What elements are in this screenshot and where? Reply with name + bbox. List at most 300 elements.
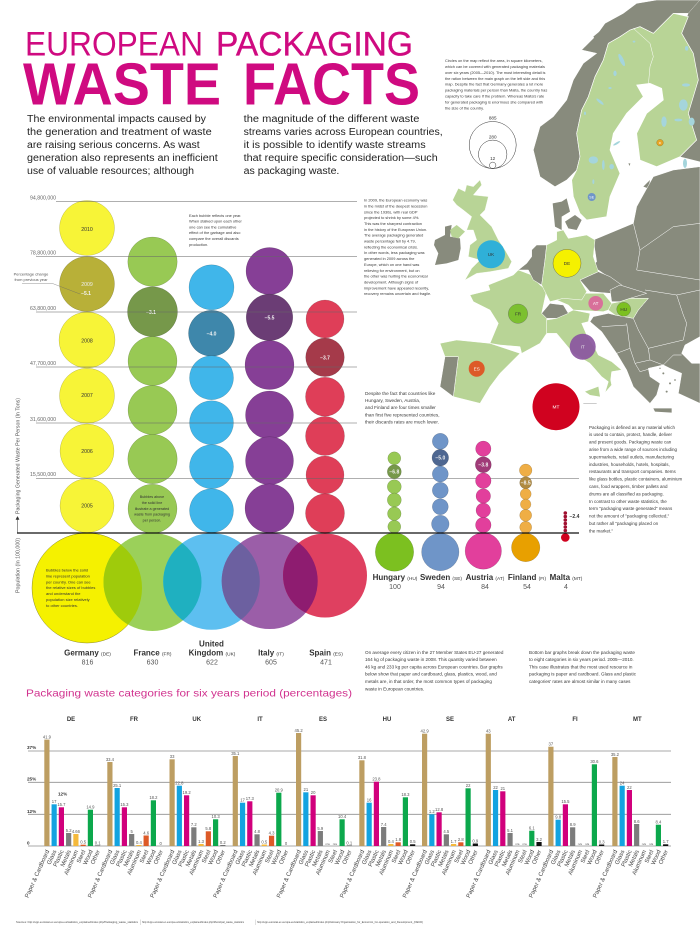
France stack of bubbles: Bubbles above	[140, 495, 164, 499]
text: bottom bar graphs: Bottom bar graphs break down the packaging waste	[529, 650, 635, 655]
baseline axis	[17, 532, 579, 534]
bars: AT: Glass	[488, 849, 500, 866]
bars: IT: 0.5	[261, 839, 268, 844]
text: bottom bar graphs: to eight categories in six years period. 2005—2010.	[529, 657, 634, 662]
chart scale and grid: 37%	[27, 745, 36, 750]
bars: ES: n/a	[326, 842, 330, 846]
text: each bubble reflects one year: Each bubble reflects one year.	[189, 213, 241, 218]
callout: percentage change: Percentage change	[14, 272, 49, 276]
bars: FR: Wood	[146, 849, 158, 866]
Italy stack of bubbles	[245, 248, 294, 533]
map circles by country: UK	[488, 252, 495, 257]
text: 2009 economy: since the 1930s, with real GDP	[364, 209, 418, 214]
bars: FR: Metals	[123, 849, 136, 868]
text: circles on the map: capacity to take care if the problem. Whereas Malta's rate	[445, 94, 544, 98]
text: 2009 economy: recovery remains uncertain and fragile.	[364, 291, 431, 296]
country population labels: Austria (AT)	[466, 573, 505, 582]
text: packaging definition: cans, food wrappers, timber pallets and	[589, 484, 668, 489]
text: packaging definition: term "packaging waste generated" means	[589, 506, 673, 511]
text: bubbles below the solid line: line represent population	[46, 573, 90, 578]
Hungary bubbles: −6.8	[389, 470, 399, 476]
bars: MT: 24	[620, 780, 625, 786]
text: bubbles below the solid line	[46, 568, 95, 608]
bars: UK: 1.3	[198, 839, 205, 844]
title: WASTE	[23, 52, 221, 118]
text: packaging definition	[589, 425, 683, 533]
Austria bubbles: −3.8	[478, 462, 488, 468]
intro text column 1: use of valuable resources; although	[27, 166, 194, 177]
bars: FI: Other	[594, 849, 606, 866]
bars: DE: 14.9	[86, 804, 95, 810]
bars: FI: Plastic	[557, 849, 570, 868]
text: 2009 economy: Europe, which on one hand was	[364, 262, 419, 267]
text: on average: On average every citizen in the 27 Member States EU-27 generated	[365, 650, 504, 655]
bars: FR: 15.3	[120, 802, 129, 807]
bars: IT: 4.8	[254, 829, 261, 834]
text: each bubble reflects one year: one can see the cumulative	[189, 224, 236, 229]
text: 2009 economy: the other was hurting the economical	[364, 274, 428, 279]
bars: MT: n/a	[649, 842, 654, 846]
bars: AT: Wood	[524, 849, 536, 866]
text: packaging definition: industries, households, hotels, hospitals,	[589, 462, 670, 467]
bars: ES: Aluminum	[315, 849, 332, 876]
bars: IT: Paper & Cardboard	[213, 849, 240, 899]
bars: HU: Plastic	[368, 849, 381, 868]
bars: FI: Wood	[587, 849, 599, 866]
bars: HU: Aluminum	[379, 849, 395, 876]
Germany stack of bubbles: −5.1	[81, 291, 91, 297]
text: packaging definition: drums are all classified as packaging.	[589, 491, 664, 496]
text: on average: waste in European countries.	[365, 686, 424, 691]
bars: DE: Wood	[83, 849, 95, 866]
map circles by country: SE	[589, 195, 595, 199]
bars: UK: Steel	[202, 849, 213, 864]
text: circles on the map: the ration between the main graph on the left side and this	[445, 76, 545, 81]
area legend circles: 12	[490, 156, 496, 161]
bars: IT: IT	[257, 717, 263, 723]
bars: HU: Glass	[362, 849, 373, 866]
bars: FI: FI	[572, 717, 578, 723]
text: 2009 economy: development. Although signs of	[364, 280, 419, 284]
Germany stack of bubbles: 2005	[81, 504, 93, 510]
bars: ES: Other	[342, 849, 354, 866]
bars: IT: 4.3	[269, 830, 275, 836]
bars: UK: 10.3	[212, 814, 220, 819]
grid lines and axis values: 63,800,000	[30, 306, 56, 312]
map circles by country: HU	[620, 307, 627, 312]
bars: DE: Other	[90, 849, 102, 866]
intro text column 1: are raising serious concerns. As wast	[27, 140, 200, 151]
area legend circles	[469, 116, 516, 168]
text: circles on the map: the size of the country.	[445, 105, 484, 110]
bars: AT: Paper & Cardboard	[466, 849, 493, 899]
bars: HU: 23.8	[372, 776, 381, 782]
bars: ES: n/a	[333, 842, 337, 846]
bars: SE: Other	[468, 849, 480, 866]
title: PACKAGING	[216, 26, 413, 64]
country population labels: Hungary (HU)	[373, 573, 418, 582]
text: 2009 economy: relieving for environment, but on	[364, 268, 420, 273]
intro text column 2: it is possible to identify waste streams	[244, 140, 426, 151]
text: despite the fact: Despite the fact that countries like	[365, 391, 436, 396]
bars: IT: 17	[240, 798, 246, 802]
bars: SE: Glass	[424, 849, 436, 866]
text: bottom bar graphs: categories' rates are almost similar in many cases	[529, 679, 631, 684]
text: on average	[365, 650, 504, 691]
chart scale and grid: 12%	[27, 809, 36, 814]
France stack of bubbles: illustrate a generated	[135, 507, 169, 511]
country population labels: 94	[437, 584, 445, 591]
bars: AT: Other	[532, 849, 543, 866]
map circles by country: FR	[515, 311, 522, 316]
bars: UK: 19.2	[183, 790, 191, 795]
bars: UK: Paper & Cardboard	[150, 849, 176, 899]
bars: FR: 5	[130, 829, 133, 834]
Sweden bubbles	[422, 433, 459, 571]
bars: FR	[88, 717, 165, 899]
Malta bubbles: −2.4	[570, 514, 580, 520]
text: 2009 economy: reflecting the economical crisis.	[364, 244, 418, 249]
text: each bubble reflects one year	[189, 213, 242, 247]
bars: IT: Steel	[265, 849, 276, 864]
grid lines and axis values: 31,600,000	[30, 417, 56, 423]
bars: ES: Steel	[328, 849, 339, 864]
bars: ES: 5.9	[317, 826, 324, 831]
Germany stack of bubbles: 2009	[81, 282, 93, 288]
bars: MT	[593, 717, 670, 899]
bars: MT: 8.4	[655, 820, 662, 824]
bars: SE: 1.7	[451, 839, 457, 844]
bars: ES	[276, 717, 354, 899]
bars: ES: 21	[304, 787, 309, 792]
bars: MT: Aluminum	[632, 849, 648, 876]
text: packaging definition: is used to contain, protect, handle, deliver	[589, 432, 673, 437]
sources footer: Sources: http://epp.eurostat.ec.europa.eu/statistics_explained/index.php/Packaging_waste_statistics	[16, 921, 139, 924]
bars: ES: 20	[311, 790, 316, 795]
text: bottom bar graphs: packaging is paper and cardboard. Glass and plastic	[529, 672, 637, 677]
bars: MT: Paper & Cardboard	[593, 849, 619, 899]
text: bubbles below the solid line: Bubbles below the solid	[46, 568, 88, 572]
bars: AT: AT	[508, 717, 516, 723]
bars: IT: 0	[285, 841, 288, 846]
bars: SE: Steel	[454, 849, 465, 864]
bars: IT: 20.9	[275, 788, 284, 792]
country population labels: Malta (MT)	[550, 573, 583, 582]
bars: DE: 0.1	[95, 840, 101, 845]
text: circles on the map: map. Despite the fact that Germany generates a lot more	[445, 82, 543, 87]
bars: FR: 33.4	[106, 757, 115, 762]
bars: IT: Other	[279, 849, 290, 866]
bars: SE: 2.8	[458, 837, 464, 842]
bars: IT: Glass	[235, 849, 247, 866]
intro text column 2: streams varies across European countries,	[244, 127, 443, 138]
bars: FI: Glass	[551, 849, 562, 866]
chart scale and grid: 0	[27, 840, 30, 846]
chart scale and grid: 25%	[27, 776, 36, 782]
title: EUROPEAN	[25, 26, 203, 64]
grid lines and axis values: 94,800,000	[30, 195, 56, 201]
bars: MT: Plastic	[621, 849, 634, 868]
bars: DE: 41.9	[43, 734, 52, 739]
text: 2009 economy: In other words, less packaging was	[364, 250, 425, 255]
text: each bubble reflects one year: compare the overall discards	[189, 236, 239, 241]
bars: MT: Steel	[644, 849, 655, 864]
bars: DE: Glass	[47, 849, 58, 866]
bars: ES: Paper & Cardboard	[276, 849, 303, 899]
bars: HU: 7.4	[381, 822, 387, 827]
area legend circles: 280	[489, 134, 497, 140]
text: bubbles below the solid line: to other countries.	[46, 603, 78, 608]
country population labels: 471	[320, 660, 332, 666]
text: on average: 46 kg and 233 kg per capita across European countries. Bar graphs	[365, 664, 503, 669]
bars: MT: 22	[627, 785, 632, 790]
chart scale and grid	[27, 745, 671, 846]
country population labels: 622	[206, 660, 218, 666]
country population labels: 4	[564, 584, 568, 591]
bars: MT: n/a	[642, 842, 646, 846]
text: 2009 economy: In 2009, the European economy was	[364, 198, 427, 202]
bars: DE: 0.5	[80, 840, 87, 844]
text: each bubble reflects one year: When stalked upon each other	[189, 219, 242, 224]
text: on average: below show that paper and cardboard, glass, plastics, wood, and	[365, 672, 497, 677]
bars: UK: Metals	[185, 849, 198, 868]
sources footer: http://epp.eurostat.ec.europa.eu/statistics_explained/index.php/Municipal_waste_statistics	[142, 921, 245, 924]
bars: FI: Paper & Cardboard	[529, 849, 555, 899]
text: packaging definition: Packaging is defined as any material which	[589, 425, 676, 430]
Hungary bubbles	[375, 452, 414, 571]
France stack of bubbles: waste from packaging	[134, 513, 170, 517]
bars: AT: 5.1	[507, 828, 514, 833]
text: circles on the map: Circles on the map reflect the area, in square kilometers,	[445, 58, 543, 63]
bars: UK: UK	[192, 717, 202, 723]
bars: FI: Metals	[564, 849, 577, 868]
area legend circles: 885	[489, 116, 497, 120]
bars: ES: 45.2	[295, 728, 303, 733]
France stack of bubbles: the solid line	[142, 501, 162, 505]
text: 2009 economy: in the history of the European Union.	[364, 227, 427, 232]
grid lines and axis values: 78,800,000	[30, 250, 56, 256]
bars: AT: 21	[500, 786, 506, 791]
bars: MT: 8.6	[634, 819, 640, 824]
country population labels: 84	[481, 584, 489, 591]
bars: FI: 15.5	[561, 799, 570, 804]
Malta bubbles	[561, 511, 580, 542]
bars: HU: 0.4	[388, 839, 394, 844]
bars: IT: Wood	[271, 849, 283, 866]
map circles by country: MT	[553, 405, 560, 411]
bars: HU: HU	[383, 717, 391, 723]
intro text column 1: the generation and treatment of waste	[27, 127, 212, 138]
text: on average: 164 kg of packaging waste in 2008. This quantity varied between	[365, 657, 497, 662]
Italy stack of bubbles: −5.5	[265, 316, 275, 322]
Germany stack of bubbles: 2007	[81, 393, 93, 399]
bars: HU: 1.8	[395, 837, 402, 842]
bars: MT: Glass	[615, 849, 626, 866]
sources footer	[16, 920, 423, 925]
bars: ES: 10.4	[338, 814, 347, 819]
bars: IT: Plastic	[241, 849, 254, 868]
text: circles on the map: over six years (2005—2010). The most interesting detail is	[445, 70, 546, 75]
text: packaging definition: not the amount of "packaging collected,"	[589, 514, 670, 519]
bars: MT: MT	[633, 717, 642, 723]
bars: DE: Metals	[60, 849, 73, 868]
text: 2009 economy: This was the sharpest contraction	[364, 221, 422, 226]
map circles by country: DE	[564, 261, 570, 266]
bars: AT: Aluminum	[505, 849, 522, 876]
grid lines and axis values	[30, 195, 579, 479]
bars: AT: n/a	[522, 842, 527, 846]
bars: HU: 18.3	[401, 792, 410, 797]
bars: FR: 25.1	[113, 783, 122, 788]
bars: SE: Paper & Cardboard	[402, 849, 429, 899]
bars: SE: SE	[446, 717, 454, 723]
text: despite the fact: Hungary, Sweden, Austria,	[365, 398, 420, 403]
map of Europe	[434, 0, 700, 413]
map circles by country: ES	[474, 366, 480, 371]
bars: ES: Glass	[298, 849, 310, 866]
text: despite the fact: than first five represented countries,	[365, 412, 440, 418]
bars: MT: 35.2	[611, 752, 620, 757]
bars: HU: 31.8	[358, 755, 367, 760]
text: 2009 economy: projected to shrink by some 4%.	[364, 215, 419, 220]
text: circles on the map	[445, 58, 547, 110]
text: despite the fact	[365, 391, 440, 425]
bars: UK	[150, 717, 227, 899]
bars: IT: 35.1	[231, 751, 240, 756]
bars: HU: Wood	[398, 849, 410, 866]
United Kingdom stack of bubbles: −4.0	[207, 332, 217, 338]
bars: FI: n/a	[578, 842, 582, 846]
bars: AT: n/a	[515, 842, 520, 846]
bars: UK: Plastic	[178, 849, 191, 868]
Finland bubbles: −8.5	[521, 480, 531, 486]
map circles by country	[469, 139, 663, 430]
bars: HU	[340, 717, 417, 899]
France stack of bubbles	[128, 237, 178, 533]
text: each bubble reflects one year: production.	[189, 242, 208, 247]
text: packaging definition: arise from a wide range of sources including	[589, 447, 678, 452]
bars: FR: Steel	[139, 849, 150, 864]
text: bubbles below the solid line: and understand the	[46, 591, 81, 596]
bars: FI: Steel	[580, 849, 591, 864]
intro text column 2	[244, 114, 443, 177]
bars: DE: Aluminum	[64, 849, 80, 876]
Germany stack of bubbles: 2006	[81, 449, 93, 455]
bars: DE: 17	[52, 799, 57, 804]
callout: percentage change	[14, 272, 80, 294]
bars: DE: Paper & Cardboard	[25, 849, 51, 899]
bars: SE: 22	[466, 783, 471, 788]
bars: UK: Wood	[208, 849, 220, 866]
bars: DE: Plastic	[53, 849, 66, 868]
text: circles on the map: which can be covered with generated packaging materials	[445, 64, 545, 69]
Germany stack of bubbles: 2008	[81, 338, 93, 344]
intro text column 2: that require specific consideration—such	[244, 153, 438, 164]
bars: SE: 0.9	[472, 838, 479, 843]
country population labels: 630	[147, 660, 158, 666]
text: bubbles below the solid line: the relative sizes of bubbles	[46, 585, 95, 590]
bars: SE: Aluminum	[441, 849, 458, 876]
callout: percentage change: from previous year	[14, 277, 48, 282]
y axis arrow	[16, 516, 19, 533]
chart scale and grid: 12%	[58, 792, 67, 796]
intro text column 2: as packaging waste.	[244, 166, 339, 177]
bars: FI: Aluminum	[568, 849, 584, 876]
country population labels: Spain (ES)	[309, 649, 343, 658]
intro text column 2: the magnitude of the different waste	[244, 114, 420, 125]
France stack of bubbles: −3.1	[146, 310, 156, 316]
bars: FI: 37	[549, 742, 554, 746]
bars: HU: 0.5	[410, 839, 416, 844]
bars: DE: Steel	[76, 849, 87, 864]
bars: AT: Plastic	[494, 849, 507, 868]
bars: UK: 7.2	[191, 822, 197, 827]
text: circles on the map: packaging materials per person than Malta, the country has	[445, 88, 547, 93]
bars: HU: 16	[367, 798, 372, 802]
France stack of bubbles: per person.	[143, 519, 161, 523]
population bubbles, large countries	[32, 533, 367, 643]
text: 2009 economy: improvement have appeared recently,	[364, 285, 429, 290]
bars: AT: Metals	[502, 849, 514, 868]
bars: FR: 0	[159, 841, 162, 846]
bars: IT: Aluminum	[252, 849, 269, 876]
country population labels: Germany (DE)	[64, 649, 111, 658]
bars: ES: Wood	[335, 849, 346, 866]
bars: HU: Steel	[391, 849, 402, 864]
title	[23, 26, 420, 118]
bars: AT: 43	[486, 728, 491, 734]
Sweden bubbles: −5.0	[435, 456, 445, 462]
bars: FR: 18.2	[149, 795, 158, 800]
intro text column 1	[27, 114, 218, 177]
text: bottom bar graphs: This case illustrates that the most used resource in	[529, 664, 633, 669]
country population labels: 605	[265, 660, 277, 666]
map circles by country: FI	[659, 141, 661, 145]
country population labels: United	[199, 640, 224, 648]
bars: FR: 0.4	[136, 840, 142, 845]
bars: UK: 0.2	[220, 840, 226, 845]
bars: AT: 6.1	[529, 826, 535, 830]
bars: FR: Glass	[110, 849, 121, 866]
bars: IT: Metals	[249, 849, 261, 868]
text: circles on the map: for generated packaging is enormous she compared with	[445, 99, 543, 104]
y axis label: population: Population (In 100,000)	[16, 538, 22, 593]
text: each bubble reflects one year: effect of the garbage and also	[189, 230, 240, 235]
bars: UK: Glass	[172, 849, 184, 866]
bars: DE: 4.66	[72, 829, 81, 834]
text: packaging definition: the market."	[589, 528, 614, 533]
text: packaging definition: and present goods. Packaging waste can	[589, 440, 672, 445]
text: despite the fact: their discards rates are much lower.	[365, 420, 439, 425]
Finland bubbles	[512, 464, 540, 562]
Spain stack of bubbles: −3.7	[320, 356, 330, 362]
title: FACTS	[243, 52, 420, 118]
sources footer: http://epp.eurostat.ec.europa.eu/statistics_explained/index.php/Glossary:Organisation_for_Economic_Co-operation_and_Development_(OECD)	[257, 921, 423, 924]
country population labels: France (FR)	[133, 649, 172, 658]
bars: SE: 12.8	[435, 807, 444, 812]
text: packaging definition: but rather all "packaging placed on	[589, 521, 659, 526]
bars: UK: Other	[215, 849, 227, 866]
bars: MT: Metals	[628, 849, 641, 868]
country population labels: Kingdom (UK)	[189, 649, 236, 658]
chart title: Packaging waste categories for six years period (percentages)	[26, 688, 352, 700]
text: packaging definition: restaurants and transport companies. Items	[589, 469, 677, 474]
grid lines and axis values: 47,700,000	[30, 361, 56, 367]
text: on average: metals are, in that order, the most common types of packaging	[365, 679, 492, 684]
bars: SE: Metals	[438, 849, 451, 868]
bars: AT: 22	[493, 785, 499, 790]
Spain stack of bubbles	[306, 300, 344, 533]
